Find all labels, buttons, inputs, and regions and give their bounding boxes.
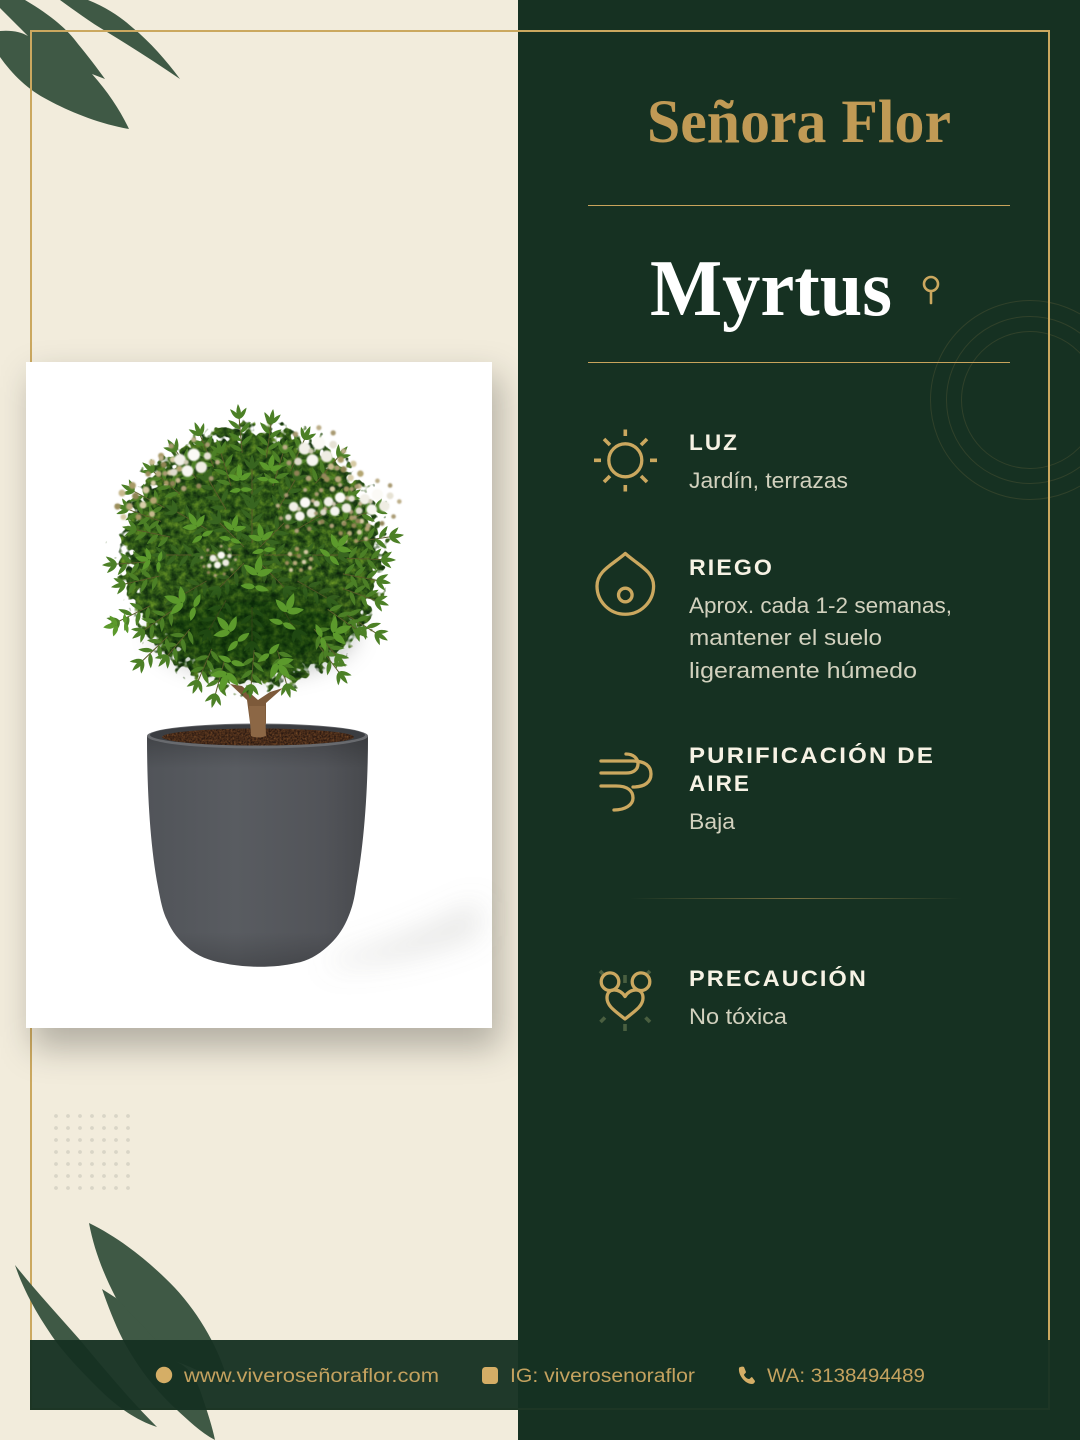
icon: pin <box>924 277 938 303</box>
white card background <box>26 362 492 1028</box>
text: whatsapp: WA: 3138494489 <box>767 1366 925 1387</box>
dot grid <box>50 1110 134 1194</box>
icon: phone <box>739 1367 755 1384</box>
icon rays <box>600 971 650 1031</box>
info block: caution <box>689 966 868 1029</box>
heading: air purification line 2: AIRE <box>689 771 751 796</box>
pot vertical shading <box>147 736 368 967</box>
trunk base <box>249 706 266 738</box>
flower clusters <box>114 425 402 577</box>
inner sprigs <box>151 454 353 656</box>
canopy <box>100 403 406 712</box>
sun rays <box>594 430 657 492</box>
brand title: Señora Flor <box>647 89 951 156</box>
text: caution value: No tóxica <box>689 1004 788 1029</box>
icon outline <box>601 973 650 1019</box>
trunk <box>230 684 283 738</box>
text: website: www.viveroseñoraflor.com <box>183 1366 439 1387</box>
text: watering line 3: ligeramente húmedo <box>689 658 917 683</box>
info block: air purification <box>689 743 935 834</box>
text: watering line 1: Aprox. cada 1-2 semanas, <box>689 593 952 618</box>
floor shadow <box>330 900 480 966</box>
foliage mass <box>120 425 384 689</box>
icon: sun <box>594 430 657 492</box>
info block: light <box>689 430 848 493</box>
grey pot <box>147 706 368 967</box>
heading: RIEGO: RIEGO <box>689 555 774 580</box>
pot body <box>147 736 368 967</box>
footer: whatsapp <box>739 1366 925 1387</box>
plant photo card <box>26 362 492 1028</box>
info block: watering <box>689 555 952 683</box>
pot inner <box>150 724 365 746</box>
bright leaf clusters <box>101 452 360 698</box>
footer band <box>30 1340 1050 1410</box>
heading: air purification line 1: PURIFICACIÓN DE <box>689 743 935 768</box>
pot rim <box>147 724 368 748</box>
divider top <box>588 205 1010 206</box>
decorative leaves: bottom left <box>15 1223 229 1440</box>
heading: LUZ: LUZ <box>689 430 739 455</box>
footer: website <box>156 1366 439 1387</box>
section divider <box>630 898 962 899</box>
icon: rounded square <box>482 1367 498 1384</box>
decorative leaves: top left <box>0 0 180 129</box>
right dark green panel <box>518 0 1080 1440</box>
text: light value: Jardín, terrazas <box>689 468 848 493</box>
concentric circle ornament <box>930 300 1080 500</box>
icon: wind <box>601 754 651 810</box>
plant name: Myrtus <box>650 245 892 333</box>
icon: water drop <box>597 554 654 614</box>
text: watering line 2: mantener el suelo <box>689 625 882 650</box>
outer sprigs <box>100 403 406 712</box>
text: instagram: IG: viverosenoraflor <box>510 1366 696 1387</box>
left cream background <box>0 0 518 1440</box>
photo card shadow <box>32 376 500 1048</box>
icon: dot <box>156 1367 172 1383</box>
footer: instagram <box>482 1366 696 1387</box>
canopy lower shading <box>160 592 350 668</box>
text: air value: Baja <box>689 809 735 834</box>
icon: heart caution <box>600 971 650 1031</box>
divider below name <box>588 362 1010 363</box>
heading: PRECAUCIÓN: PRECAUCIÓN <box>689 966 868 991</box>
soil <box>162 728 354 746</box>
right panel edge mask <box>518 340 531 1080</box>
sun disc <box>609 444 642 477</box>
